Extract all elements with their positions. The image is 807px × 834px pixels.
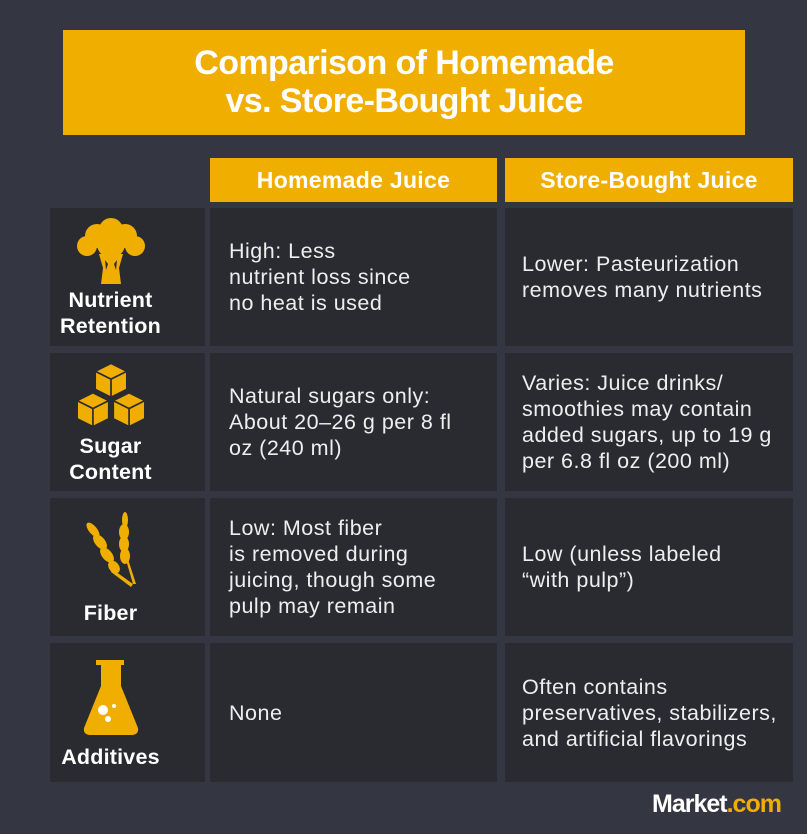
title: Comparison of Homemade (194, 44, 614, 82)
header: store-bought (505, 158, 793, 202)
label: sugar content: Content (69, 460, 152, 484)
cell: store additives (505, 643, 793, 782)
cell: homemade fiber (210, 498, 497, 636)
cell: store nutrient (505, 208, 793, 346)
icon: sugar cubes (78, 364, 144, 426)
label: additives (50, 643, 205, 782)
cell: store additives: and artificial flavorings (522, 726, 747, 750)
header: homemade: Homemade Juice (257, 167, 450, 193)
cell: store sugar: per 6.8 fl oz (200 ml) (522, 449, 730, 473)
icon: broccoli (77, 218, 145, 284)
label: nutrient retention: Nutrient (68, 288, 152, 312)
cell: store fiber (505, 498, 793, 636)
cell: store nutrient: Lower: Pasteurization (522, 252, 739, 276)
cell: store fiber: “with pulp”) (522, 568, 634, 592)
label: nutrient retention (50, 208, 205, 346)
cell: homemade fiber: is removed during (229, 542, 408, 566)
header: store-bought: Store-Bought Juice (540, 167, 758, 193)
label: sugar content: Sugar (80, 434, 141, 458)
cell: store sugar (505, 353, 793, 491)
cell: homemade nutrient (210, 208, 497, 346)
cell: store nutrient: removes many nutrients (522, 278, 762, 302)
cell: homemade fiber: Low: Most fiber (229, 516, 382, 540)
cell: store sugar: smoothies may contain (522, 397, 752, 421)
label: fiber: Fiber (84, 601, 137, 625)
label: sugar content (50, 353, 205, 491)
cell: homemade nutrient: no heat is used (229, 291, 382, 315)
title (63, 30, 745, 135)
title: vs. Store-Bought Juice (225, 82, 583, 120)
cell: homemade fiber: juicing, though some (229, 568, 436, 592)
icon: wheat (86, 512, 136, 587)
cell: homemade fiber: pulp may remain (229, 594, 395, 618)
cell: homemade sugar: oz (240 ml) (229, 436, 342, 460)
logo: Market.com (652, 790, 781, 818)
label: nutrient retention: Retention (60, 314, 161, 338)
cell: homemade sugar: About 20–26 g per 8 fl (229, 410, 452, 434)
cell: store additives: Often contains (522, 674, 668, 698)
label: fiber (50, 498, 205, 636)
label: additives: Additives (61, 745, 160, 769)
cell: homemade nutrient: High: Less (229, 239, 336, 263)
cell: homemade sugar: Natural sugars only: (229, 384, 430, 408)
cell: homemade sugar (210, 353, 497, 491)
cell: homemade additives: None (229, 700, 282, 724)
header: homemade (210, 158, 497, 202)
cell: homemade additives (210, 643, 497, 782)
cell: store sugar: Varies: Juice drinks/ (522, 371, 723, 395)
cell: store additives: preservatives, stabilizers, (522, 700, 777, 724)
cell: store fiber: Low (unless labeled (522, 542, 722, 566)
icon: flask (84, 660, 138, 735)
cell: store sugar: added sugars, up to 19 g (522, 423, 772, 447)
cell: homemade nutrient: nutrient loss since (229, 265, 411, 289)
